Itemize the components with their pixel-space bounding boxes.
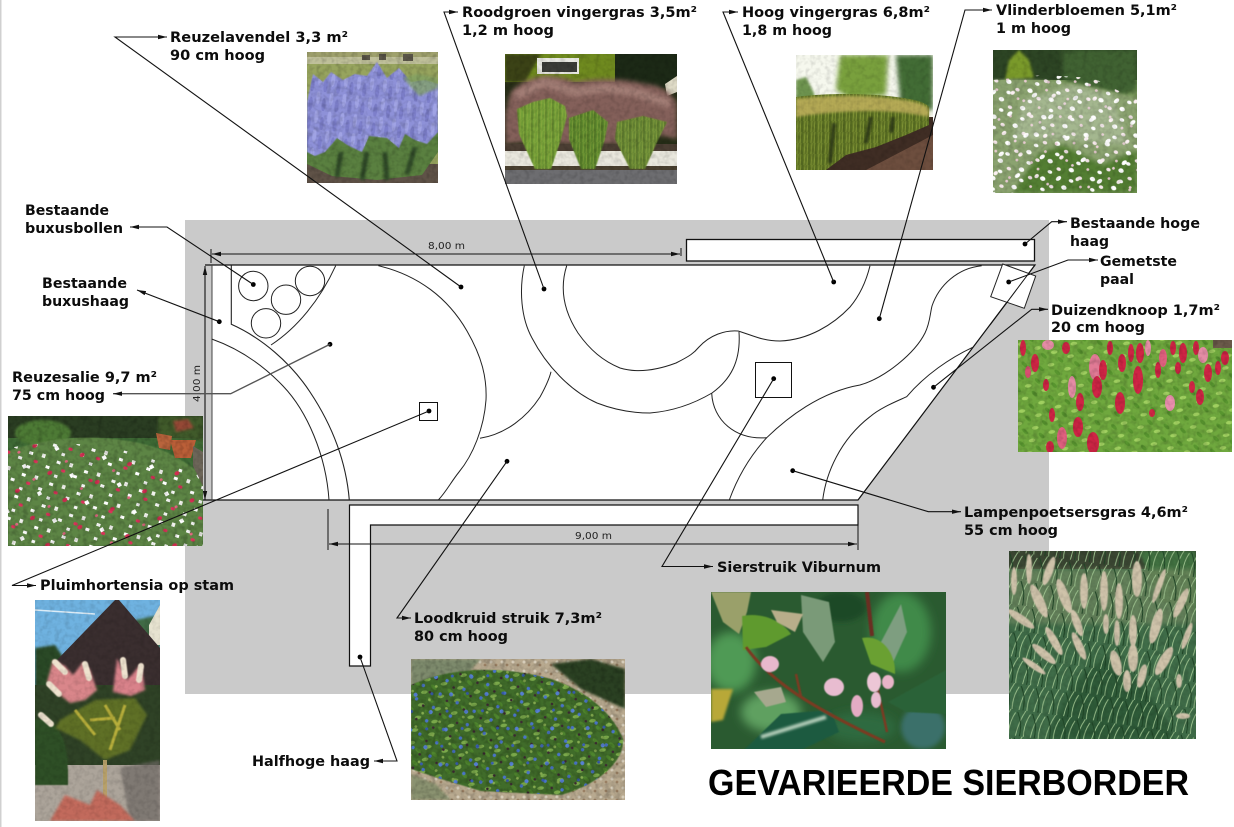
- callout: Pluimhortensia op stam: Pluimhortensia op stam: [40, 578, 234, 594]
- photo: reuzesalie: [8, 416, 203, 546]
- callout: Vlinderbloemen: 1 m hoog: [996, 21, 1071, 37]
- dimension: 9,00 m: 9,00 m: [575, 531, 612, 542]
- boxwood balls: [239, 266, 325, 338]
- callout: Bestaande buxushaag: Bestaande: [42, 276, 127, 292]
- photo: viburnum: [711, 592, 946, 749]
- callout: Pluimhortensia op stam: [12, 409, 431, 594]
- callout: Hoog vingergras: [723, 5, 930, 284]
- viburnum square: [756, 362, 792, 398]
- photo: roodgroen vingergras: [505, 54, 677, 184]
- callout: Gemetste paal: paal: [1100, 272, 1134, 288]
- photo: pluimhortensia: [35, 600, 160, 821]
- callout: Lampenpoetsersgras: Lampenpoetsersgras 4,6m²: [964, 505, 1188, 521]
- callout: Reuzelavendel: [115, 30, 463, 289]
- callout: Bestaande buxushaag: [42, 276, 222, 324]
- callout: Gemetste paal: Gemetste: [1100, 254, 1177, 270]
- callout: Duizendknoop: 20 cm hoog: [1051, 320, 1145, 336]
- callout: Bestaande buxusbollen: [25, 203, 256, 287]
- existing tall hedge: [686, 240, 1034, 261]
- callout: Lampenpoetsersgras: [790, 468, 1188, 539]
- callout: Duizendknoop: [931, 303, 1220, 390]
- callout: Reuzelavendel: Reuzelavendel 3,3 m²: [170, 30, 348, 46]
- callout: Vlinderbloemen: [877, 3, 1177, 321]
- callout: Gemetste paal: [1006, 254, 1177, 288]
- callout: Roodgroen vingergras: Roodgroen vingergras 3,5m²: [462, 5, 697, 21]
- callout: Reuzesalie: 75 cm hoog: [12, 388, 105, 404]
- callout: Bestaande buxushaag: buxushaag: [42, 294, 129, 310]
- callout: Hoog vingergras: 1,8 m hoog: [742, 23, 832, 39]
- photo: loodkruid: [411, 659, 625, 800]
- callout: Reuzelavendel: 90 cm hoog: [170, 48, 265, 64]
- callout: Loodkruid struik: Loodkruid struik 7,3m²: [414, 611, 602, 627]
- photo: hoog vingergras: [796, 55, 933, 170]
- callout: Roodgroen vingergras: [444, 5, 697, 291]
- photo: reuzelavendel: [307, 52, 438, 183]
- callout: Sierstruik Viburnum: Sierstruik Viburnum: [717, 560, 881, 576]
- callout: Lampenpoetsersgras: 55 cm hoog: [964, 523, 1058, 539]
- photo: duizendknoop: [1018, 340, 1232, 452]
- callout: Bestaande buxusbollen: buxusbollen: [25, 221, 123, 237]
- callout: Bestaande buxusbollen: Bestaande: [25, 203, 109, 219]
- dimension: 4,00 m: 4,00 m: [192, 365, 203, 402]
- callout: Halfhoge haag: [252, 655, 397, 770]
- callout: Sierstruik Viburnum: [662, 376, 881, 576]
- low hedge L-shape: [350, 505, 858, 666]
- callout: Reuzesalie: Reuzesalie 9,7 m²: [12, 370, 157, 386]
- photo: lampenpoetsersgras: [1009, 551, 1196, 739]
- callout: Vlinderbloemen: Vlinderbloemen 5,1m²: [996, 3, 1177, 19]
- callout: Halfhoge haag: Halfhoge haag: [252, 754, 370, 770]
- planting bed lines: [212, 265, 982, 500]
- callout: Loodkruid struik: 80 cm hoog: [414, 629, 508, 645]
- small shrub square: [420, 402, 438, 420]
- brick post: [991, 264, 1036, 308]
- callout: Bestaande hoge haag: [1023, 216, 1200, 250]
- callout: Bestaande hoge haag: haag: [1070, 234, 1109, 250]
- callout: Bestaande hoge haag: Bestaande hoge: [1070, 216, 1200, 232]
- callout: Hoog vingergras: Hoog vingergras 6,8m²: [742, 5, 930, 21]
- title: GEVARIEERDE SIERBORDER: [708, 762, 1189, 803]
- grey plot background: [185, 220, 1049, 694]
- garden plan: [202, 240, 1036, 666]
- photo: vlinderbloemen: [993, 50, 1137, 193]
- callout: Loodkruid struik: [397, 459, 602, 645]
- dimension: 8,00 m: 8,00 m: [428, 241, 465, 252]
- callout: Roodgroen vingergras: 1,2 m hoog: [462, 23, 554, 39]
- callout: Reuzesalie: [12, 342, 332, 404]
- border area: [212, 265, 1035, 500]
- callout: Duizendknoop: Duizendknoop 1,7m²: [1051, 303, 1220, 319]
- dimension: 9,00 m: [328, 505, 858, 550]
